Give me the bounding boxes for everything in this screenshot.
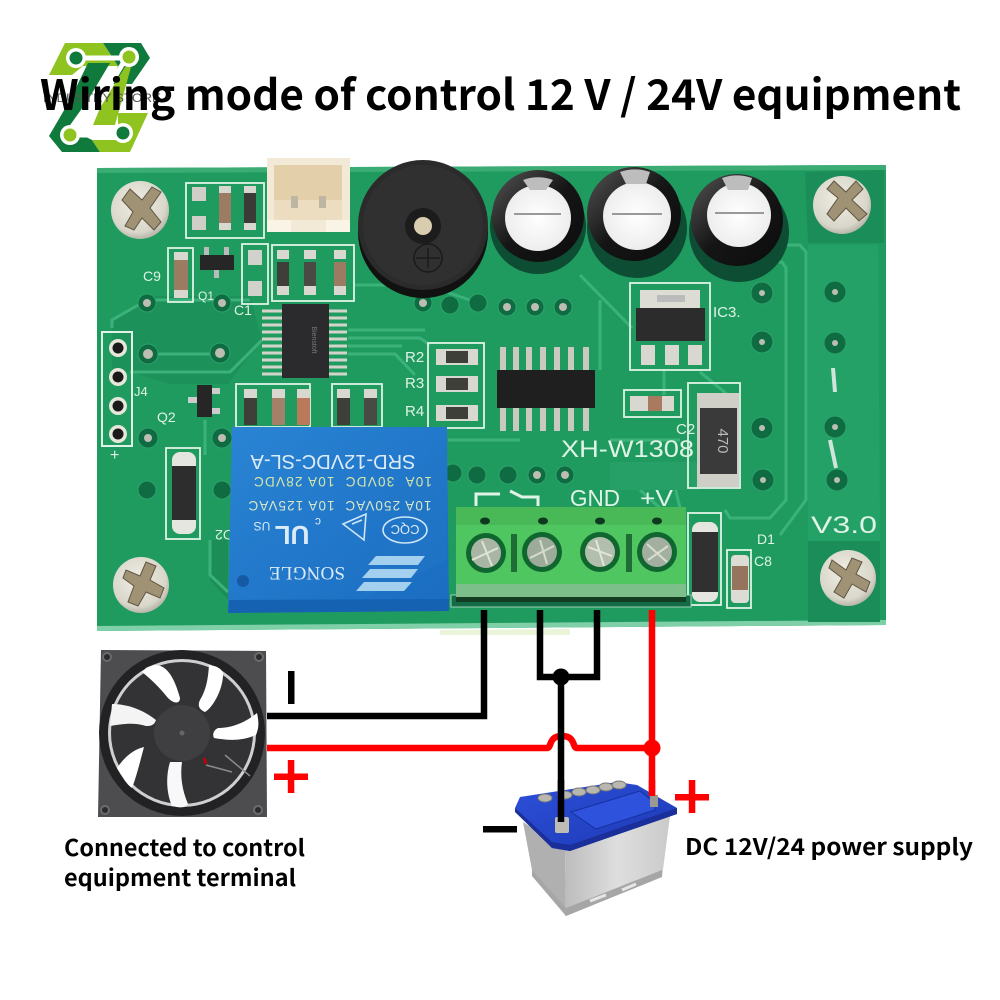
- relay: SRD-12VDC-SL-A: US: [254, 519, 270, 533]
- silkscreen labels: D2: [215, 527, 233, 543]
- relay: SRD-12VDC-SL-A: 10A 250VAC 10A 125VAC: [248, 498, 432, 513]
- black wire junction: [552, 668, 570, 686]
- black wire: ground pair to battery: [540, 610, 597, 820]
- silkscreen labels: D1: [757, 531, 775, 547]
- silkscreen labels: IC3.: [713, 304, 741, 321]
- plus sign: fan wire polarity: [274, 760, 308, 793]
- silkscreen labels: XH-W1308: [561, 436, 694, 463]
- resistors R2 R3 R4: [436, 349, 478, 421]
- silkscreen labels: R4: [405, 403, 424, 420]
- mounting screws: [111, 176, 876, 613]
- terminal block: [451, 507, 691, 607]
- IC: SOP16 driver chip: [497, 347, 595, 431]
- label: control equipment terminal: equipment terminal: [64, 859, 296, 893]
- silkscreen labels: C8: [754, 553, 772, 569]
- silkscreen labels: C1: [234, 302, 252, 318]
- silkscreen outlines: [166, 183, 751, 608]
- icon: cooling fan: [98, 650, 267, 817]
- SMD components: lower left group: [188, 385, 377, 425]
- icon: car battery: [515, 781, 677, 916]
- logo: green Z circuit mark: [43, 43, 161, 152]
- relay: SRD-12VDC-SL-A: UL: [275, 520, 309, 550]
- power resistor 470: [697, 393, 739, 487]
- capacitor C8: [731, 555, 749, 603]
- PCB board: [97, 165, 886, 635]
- title: Wiring mode of control 12 V / 24V equipment: [40, 62, 961, 123]
- IC3 regulator: [636, 290, 705, 365]
- buzzer: [358, 160, 488, 298]
- IC: main microcontroller: Bienstoft: [310, 326, 317, 354]
- silkscreen labels: R3: [405, 375, 424, 392]
- label: power supply: DC 12V/24 power supply: [685, 828, 973, 862]
- diode D1: [692, 522, 718, 602]
- relay: SRD-12VDC-SL-A: SRD-12VDC-SL-A: [250, 450, 416, 472]
- minus sign: fan wire polarity: [288, 671, 294, 704]
- label: control equipment terminal: Connected to control: [64, 829, 305, 863]
- SMD components: top left group: [174, 186, 346, 298]
- minus sign: battery polarity: [483, 826, 517, 832]
- silkscreen labels: GND: [570, 485, 620, 511]
- red wire junction: [644, 740, 660, 756]
- electrolytic capacitors: [490, 167, 789, 282]
- plus sign: battery polarity: [675, 780, 709, 813]
- relay: SRD-12VDC-SL-A: CQC: [391, 522, 419, 537]
- relay: SRD-12VDC-SL-A: SONGLE: [269, 562, 345, 583]
- silkscreen labels: [110, 268, 877, 569]
- relay: SRD-12VDC-SL-A: [228, 427, 449, 613]
- IC: main microcontroller: [262, 304, 347, 378]
- header J4: [102, 332, 132, 446]
- diode D2: [172, 452, 196, 534]
- capacitor C2: [630, 396, 674, 411]
- connector: white JST socket: [267, 158, 350, 232]
- silkscreen labels: Q1: [198, 289, 214, 303]
- black wire: load negative: [267, 610, 484, 716]
- copper traces: [112, 245, 806, 592]
- silkscreen labels: J4: [134, 384, 148, 399]
- silkscreen labels: +: [110, 447, 119, 464]
- silkscreen labels: R2: [405, 349, 424, 366]
- solder pads: [138, 281, 848, 499]
- logo caption: INDUSTRY STORE: [43, 91, 161, 105]
- wire ends on battery terminals: [561, 780, 652, 822]
- silkscreen labels: Q2: [157, 409, 176, 425]
- red wire: positive rail with bridge hump: [267, 610, 660, 796]
- relay: SRD-12VDC-SL-A: c: [315, 515, 321, 529]
- relay: SRD-12VDC-SL-A: 10A 30VDC 10A 28VDC: [254, 474, 432, 489]
- silkscreen labels: C2: [676, 421, 695, 438]
- silkscreen labels: C9: [143, 268, 161, 284]
- silkscreen labels: V3.0: [811, 512, 877, 539]
- power resistor 470: 470: [714, 428, 731, 454]
- silkscreen labels: +V: [640, 485, 674, 511]
